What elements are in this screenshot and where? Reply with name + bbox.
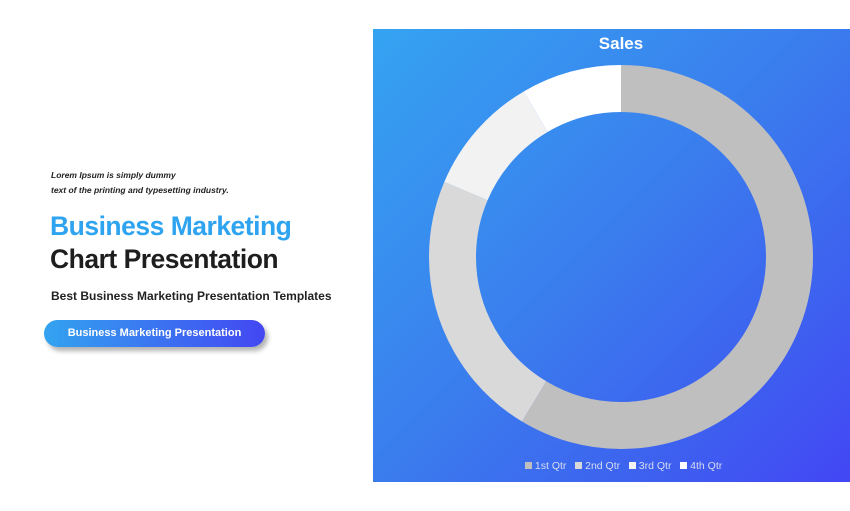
title: Business Marketing: [50, 211, 291, 241]
chart panel: [373, 29, 850, 482]
intro text: [51, 170, 229, 195]
title: Chart Presentation: [50, 244, 278, 274]
donut chart: [429, 65, 813, 449]
title: [50, 211, 291, 274]
chart title: Sales: [599, 34, 643, 53]
button: Business Marketing Presentation: [68, 327, 241, 339]
intro text: Lorem Ipsum is simply dummy: [51, 170, 176, 180]
intro text: text of the printing and typesetting industry.: [51, 185, 229, 195]
subtitle: Best Business Marketing Presentation Templates: [51, 289, 332, 303]
legend: 1st Qtr 2nd Qtr 3rd Qtr 4th Qtr: [535, 460, 722, 472]
button: [44, 320, 265, 347]
